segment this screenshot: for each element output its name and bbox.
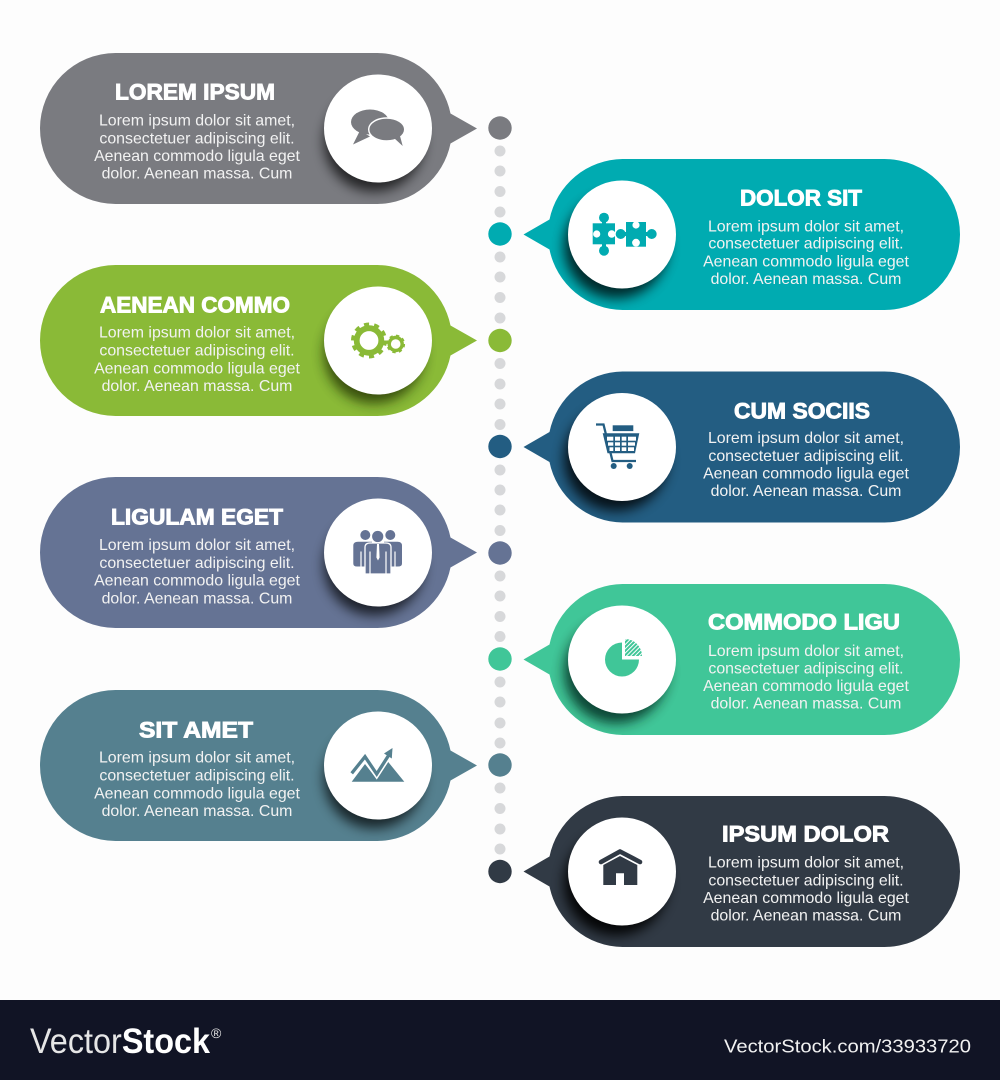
circle shadow (564, 832, 668, 936)
pill shape (40, 690, 477, 841)
circle shadow (564, 620, 668, 724)
heading: LOREM IPSUM (115, 80, 275, 104)
body text: dolor. Aenean massa. Cum (711, 696, 901, 712)
body text: Lorem ipsum dolor sit amet, (708, 643, 904, 660)
pill shape (524, 584, 960, 735)
icon: mountain trend (348, 748, 404, 782)
heading: LIGULAM EGET (111, 504, 284, 530)
pill shape (524, 796, 960, 947)
body text: Lorem ipsum dolor sit amet, (99, 750, 295, 766)
icon: chat bubbles (351, 110, 405, 146)
circle shadow (564, 407, 668, 511)
circle shadow (564, 194, 668, 298)
body text: Aenean commodo ligula eget (94, 572, 300, 590)
body text: consectetuer adipiscing elit. (708, 236, 904, 252)
body text: Aenean commodo ligula eget (94, 148, 300, 165)
body text: Lorem ipsum dolor sit amet, (99, 112, 295, 130)
body text: dolor. Aenean massa. Cum (102, 378, 292, 395)
body text: Aenean commodo ligula eget (94, 360, 300, 378)
body text: Lorem ipsum dolor sit amet, (708, 430, 904, 447)
white circle (324, 498, 432, 606)
circle shadow (324, 516, 424, 616)
footer bar (0, 1000, 1000, 1080)
body text: consectetuer adipiscing elit. (99, 342, 295, 360)
pill shape (40, 53, 477, 204)
heading: CUM SOCIIS (734, 398, 870, 424)
panel: sit amet (40, 690, 477, 841)
body text: dolor. Aenean massa. Cum (711, 908, 901, 924)
circle shadow (324, 728, 424, 828)
body text: Aenean commodo ligula eget (703, 466, 909, 482)
body text: Lorem ipsum dolor sit amet, (708, 218, 904, 236)
body text: Lorem ipsum dolor sit amet, (99, 537, 295, 554)
body text: dolor. Aenean massa. Cum (102, 166, 292, 182)
heading: COMMODO LIGU (708, 610, 900, 634)
body text: Aenean commodo ligula eget (703, 678, 909, 695)
timeline node markers (488, 116, 512, 883)
body text: consectetuer adipiscing elit. (708, 872, 904, 890)
body text: consectetuer adipiscing elit. (99, 130, 295, 148)
body text: consectetuer adipiscing elit. (99, 768, 295, 784)
body text: dolor. Aenean massa. Cum (711, 483, 901, 500)
heading: IPSUM DOLOR (722, 822, 889, 846)
pill shape (524, 372, 960, 522)
heading: DOLOR SIT (740, 186, 863, 210)
body text: Aenean commodo ligula eget (703, 254, 909, 270)
body text: dolor. Aenean massa. Cum (711, 271, 901, 288)
icon: shopping cart (596, 424, 639, 469)
icon: puzzle pieces (593, 213, 657, 256)
body text: Lorem ipsum dolor sit amet, (99, 324, 295, 342)
panel: ipsum dolor (524, 796, 960, 947)
pill shape (40, 265, 477, 416)
body text: dolor. Aenean massa. Cum (102, 590, 292, 608)
registered mark: ® (211, 1025, 222, 1041)
heading: SIT AMET (139, 718, 254, 742)
panel: aenean commo (40, 265, 477, 416)
white circle (568, 393, 676, 501)
panel: dolor sit (524, 159, 960, 310)
body text: consectetuer adipiscing elit. (708, 660, 904, 678)
icon: group of people (353, 530, 402, 574)
body text: dolor. Aenean massa. Cum (102, 803, 292, 820)
white circle (324, 712, 432, 820)
icon: pie chart (605, 639, 642, 676)
icon: gears (353, 324, 404, 356)
white circle (324, 286, 432, 394)
panel: cum sociis (524, 372, 960, 522)
pill shape (40, 477, 477, 628)
white circle (324, 74, 432, 182)
footer logo: VectorStock (30, 1022, 210, 1061)
circle shadow (324, 92, 424, 192)
body text: consectetuer adipiscing elit. (708, 448, 904, 465)
panel: ligulam eget (40, 477, 477, 628)
panel: commodo ligu (524, 584, 960, 735)
footer image id: VectorStock.com/33933720 (724, 1036, 971, 1056)
heading: AENEAN COMMO (100, 292, 290, 318)
body text: Aenean commodo ligula eget (94, 786, 300, 802)
white circle (568, 606, 676, 714)
icon: house (601, 852, 640, 885)
circle shadow (324, 304, 424, 404)
white circle (568, 818, 676, 926)
timeline dots (494, 146, 506, 854)
body text: Lorem ipsum dolor sit amet, (708, 854, 904, 872)
panel: lorem ipsum (40, 53, 477, 204)
body text: consectetuer adipiscing elit. (99, 555, 295, 572)
pill shape (524, 159, 960, 310)
body text: Aenean commodo ligula eget (703, 890, 909, 907)
white circle (568, 180, 676, 288)
